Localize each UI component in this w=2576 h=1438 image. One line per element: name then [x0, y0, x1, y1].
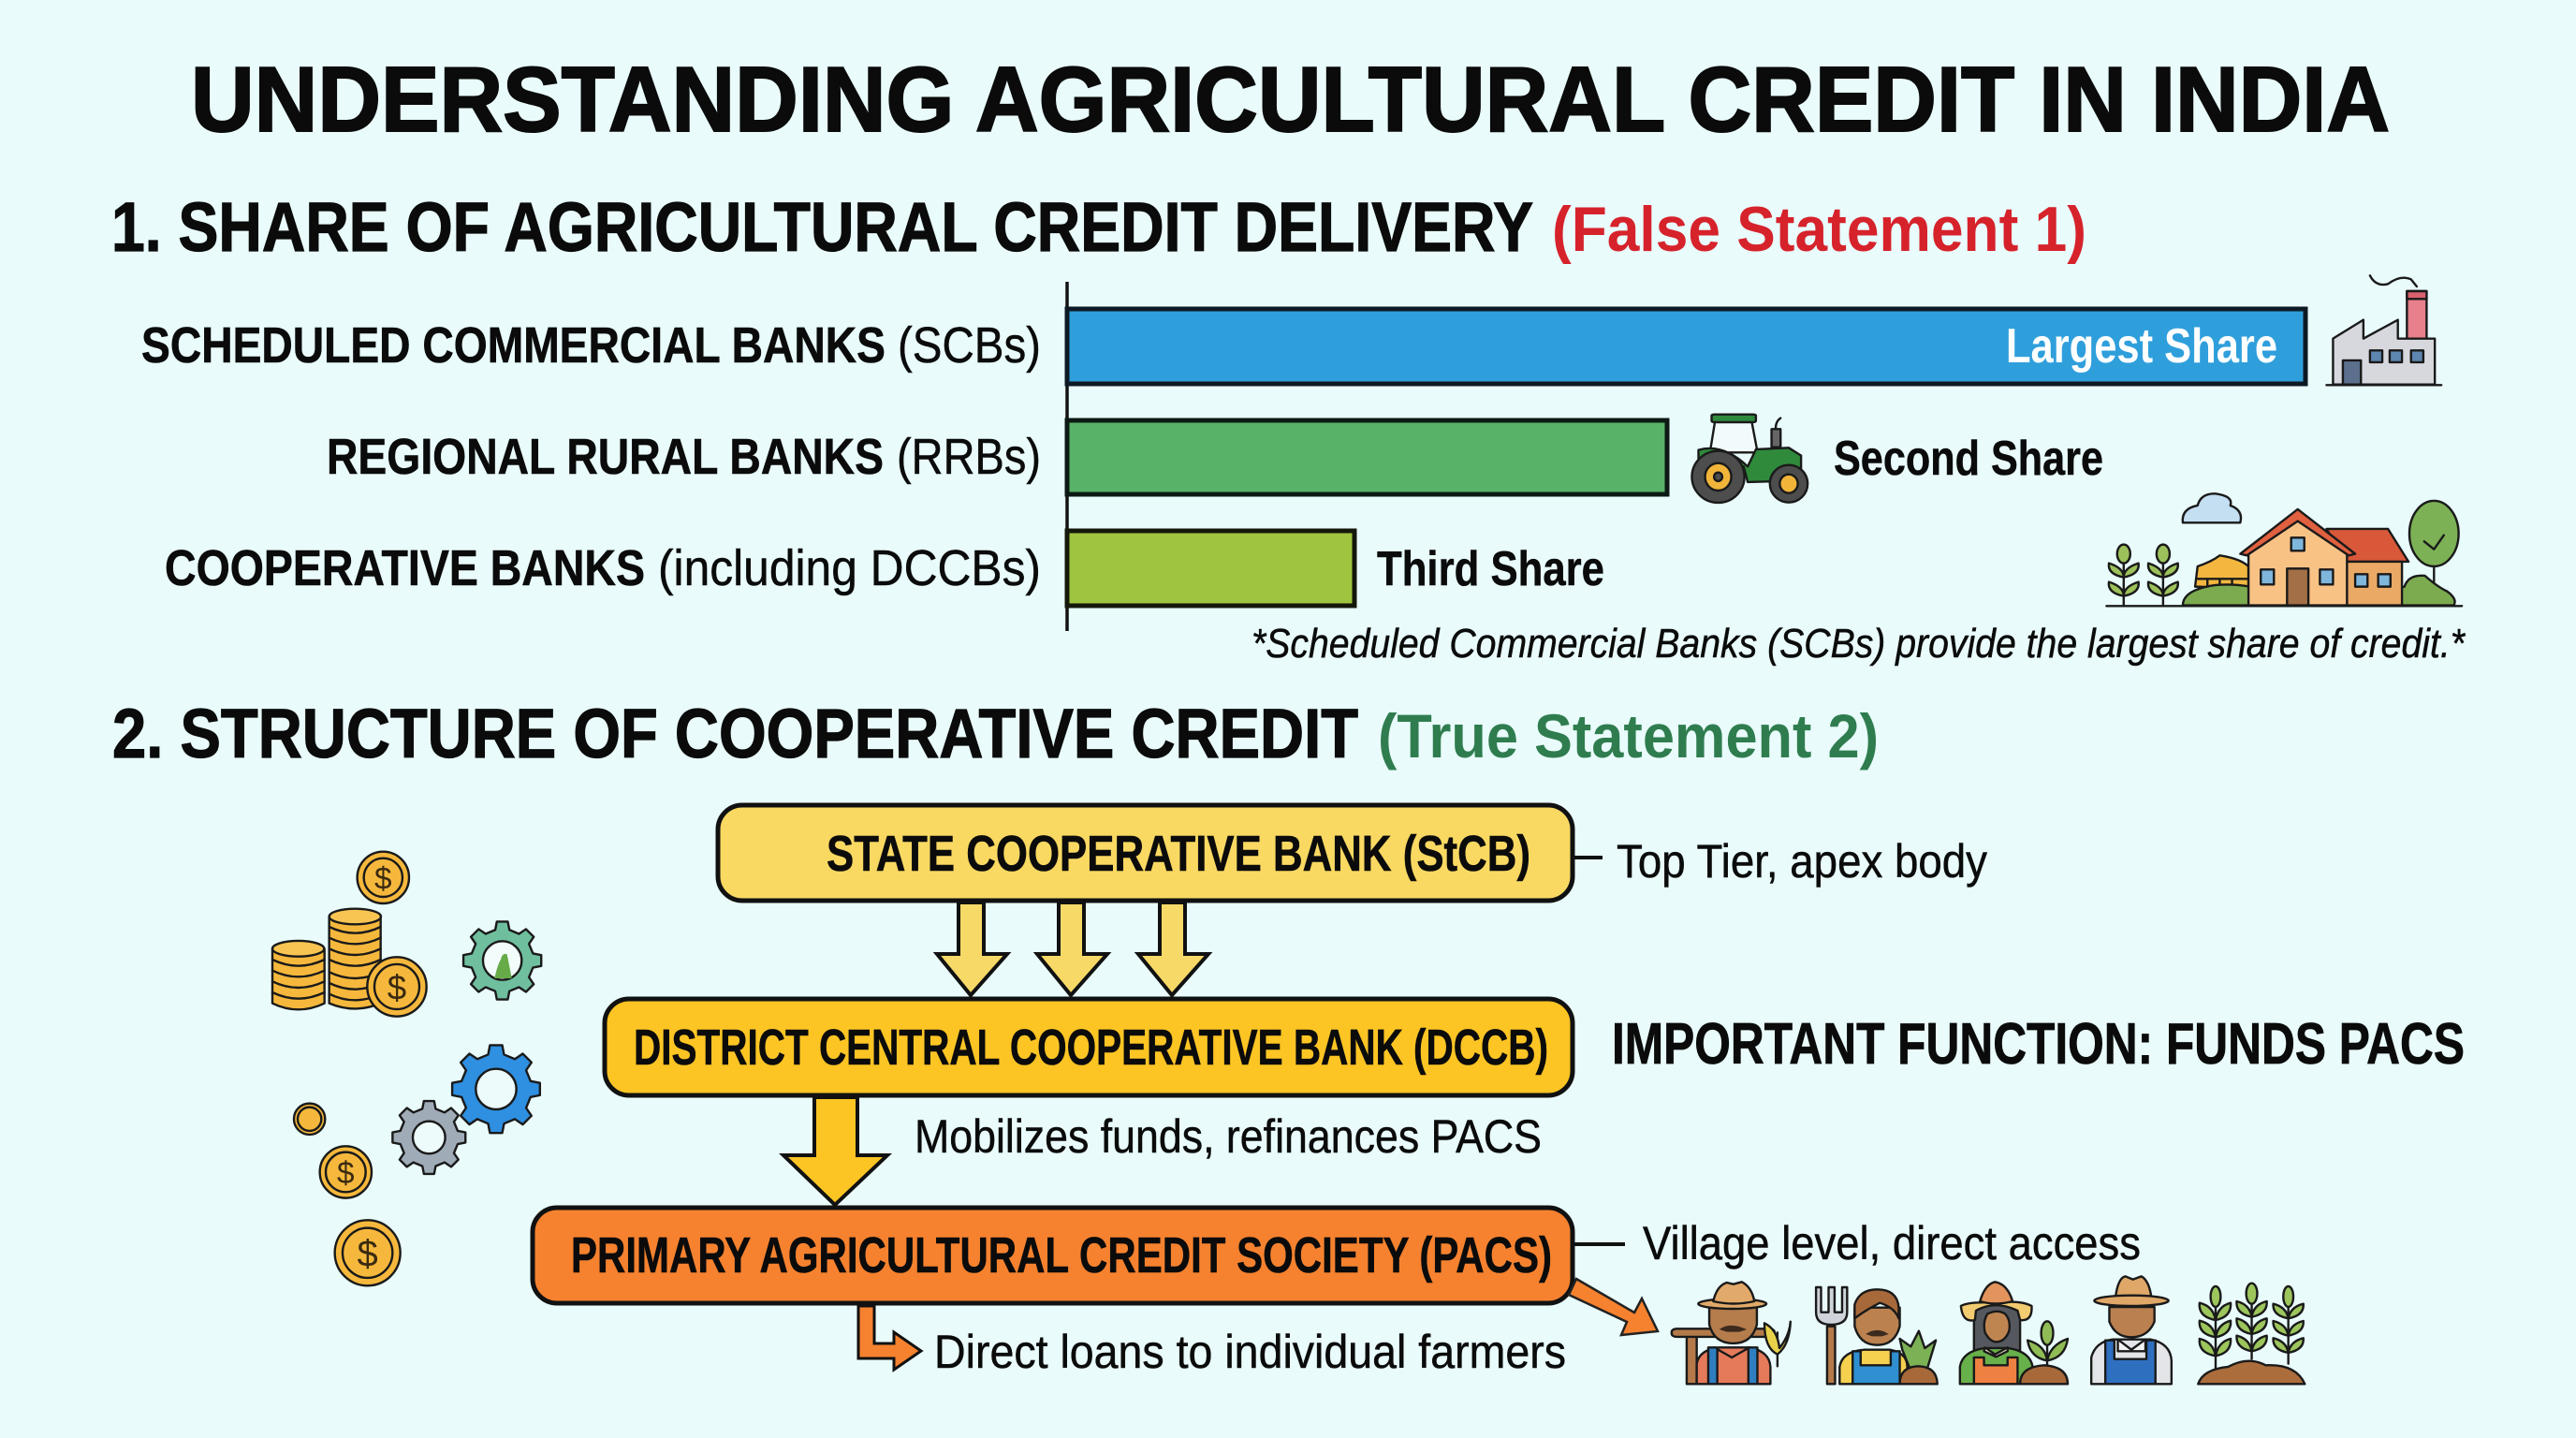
row label: RRBs: (RRBs)	[897, 429, 1041, 485]
row label: cooperative banks: (including DCCBs)	[658, 540, 1041, 596]
icon: factory	[2326, 275, 2441, 385]
note: mobilizes funds: Mobilizes funds, refinances PACS	[915, 1110, 1542, 1163]
callout: village level: Village level, direct access	[1643, 1217, 2141, 1269]
icon: crops	[2198, 1284, 2305, 1384]
section 2 heading: 2. STRUCTURE OF COOPERATIVE CREDIT	[112, 695, 1358, 772]
chart axis	[1065, 282, 1069, 631]
bar: scheduled commercial banks	[1067, 309, 2305, 384]
icon: middle coin	[320, 1146, 372, 1198]
icon: farmer with pitchfork	[1816, 1287, 1938, 1384]
section 1 heading: (False Statement 1)	[1552, 194, 2086, 265]
icon: blue gear	[452, 1045, 540, 1133]
box: primary agricultural credit society	[533, 1208, 1573, 1303]
icon: bottom coin: $	[358, 1234, 378, 1275]
footnote: *Scheduled Commercial Banks (SCBs) provide the largest share of credit.*	[1251, 621, 2466, 667]
icon: tractor	[1691, 415, 1808, 503]
box: primary agricultural credit society: PRIMARY AGRICULTURAL CREDIT SOCIETY (PACS)	[571, 1227, 1552, 1284]
icon: teal gear	[463, 921, 541, 1000]
row label: RRBs: REGIONAL RURAL BANKS	[327, 429, 884, 485]
arrow: direct loans bent arrow	[858, 1306, 921, 1370]
value label: second share: Second Share	[1834, 432, 2103, 486]
icons: farmers row	[1672, 1276, 2305, 1384]
note: direct loans: Direct loans to individual farmers	[934, 1326, 1566, 1378]
icon: grey gear	[392, 1101, 465, 1174]
row label: SCBs: (SCBs)	[898, 317, 1041, 374]
value label: third share: Third Share	[1377, 542, 1604, 596]
arrow: PACS to farmers	[1569, 1279, 1658, 1335]
icon: farmer in hat	[2091, 1276, 2172, 1384]
box: state cooperative bank	[718, 805, 1573, 901]
icon: bottom coin	[335, 1220, 401, 1285]
row label: cooperative banks: COOPERATIVE BANKS	[165, 540, 645, 596]
icon: coin stacks: $	[388, 968, 406, 1006]
box: state cooperative bank: STATE COOPERATIVE BANK (StCB)	[827, 826, 1530, 882]
arrow: DCCB to PACS	[783, 1097, 887, 1205]
row label: cooperative banks	[165, 540, 1041, 596]
box: district central cooperative bank	[605, 999, 1573, 1095]
icon: top coin: $	[374, 861, 392, 896]
section 1 heading: 1. SHARE OF AGRICULTURAL CREDIT DELIVERY	[111, 188, 1533, 266]
icon: middle coin: $	[337, 1156, 355, 1191]
box: district central cooperative bank: DISTRICT CENTRAL COOPERATIVE BANK (DCCB)	[634, 1020, 1548, 1076]
callout: top tier: Top Tier, apex body	[1617, 835, 1987, 888]
icon: village scene	[2106, 493, 2462, 606]
row label: SCBs: SCHEDULED COMMERCIAL BANKS	[141, 317, 886, 374]
arrows: StCB to DCCB	[937, 902, 1208, 995]
bar: regional rural banks	[1067, 420, 1667, 494]
icon: woman farmer	[1960, 1282, 2068, 1384]
icon: top coin	[358, 852, 409, 903]
icon: coin stacks	[272, 909, 427, 1017]
title: UNDERSTANDING AGRICULTURAL CREDIT IN INDIA	[191, 48, 2390, 151]
bar: cooperative banks	[1067, 531, 1354, 606]
section 2 heading: (True Statement 2)	[1378, 701, 1879, 770]
icon: coins and gears cluster	[272, 852, 541, 1285]
value label: largest share: Largest Share	[2006, 319, 2277, 374]
icon: farmer with hoe	[1672, 1282, 1791, 1384]
icon: small coin	[294, 1104, 325, 1135]
panel: credit share bar chart	[141, 282, 2305, 631]
